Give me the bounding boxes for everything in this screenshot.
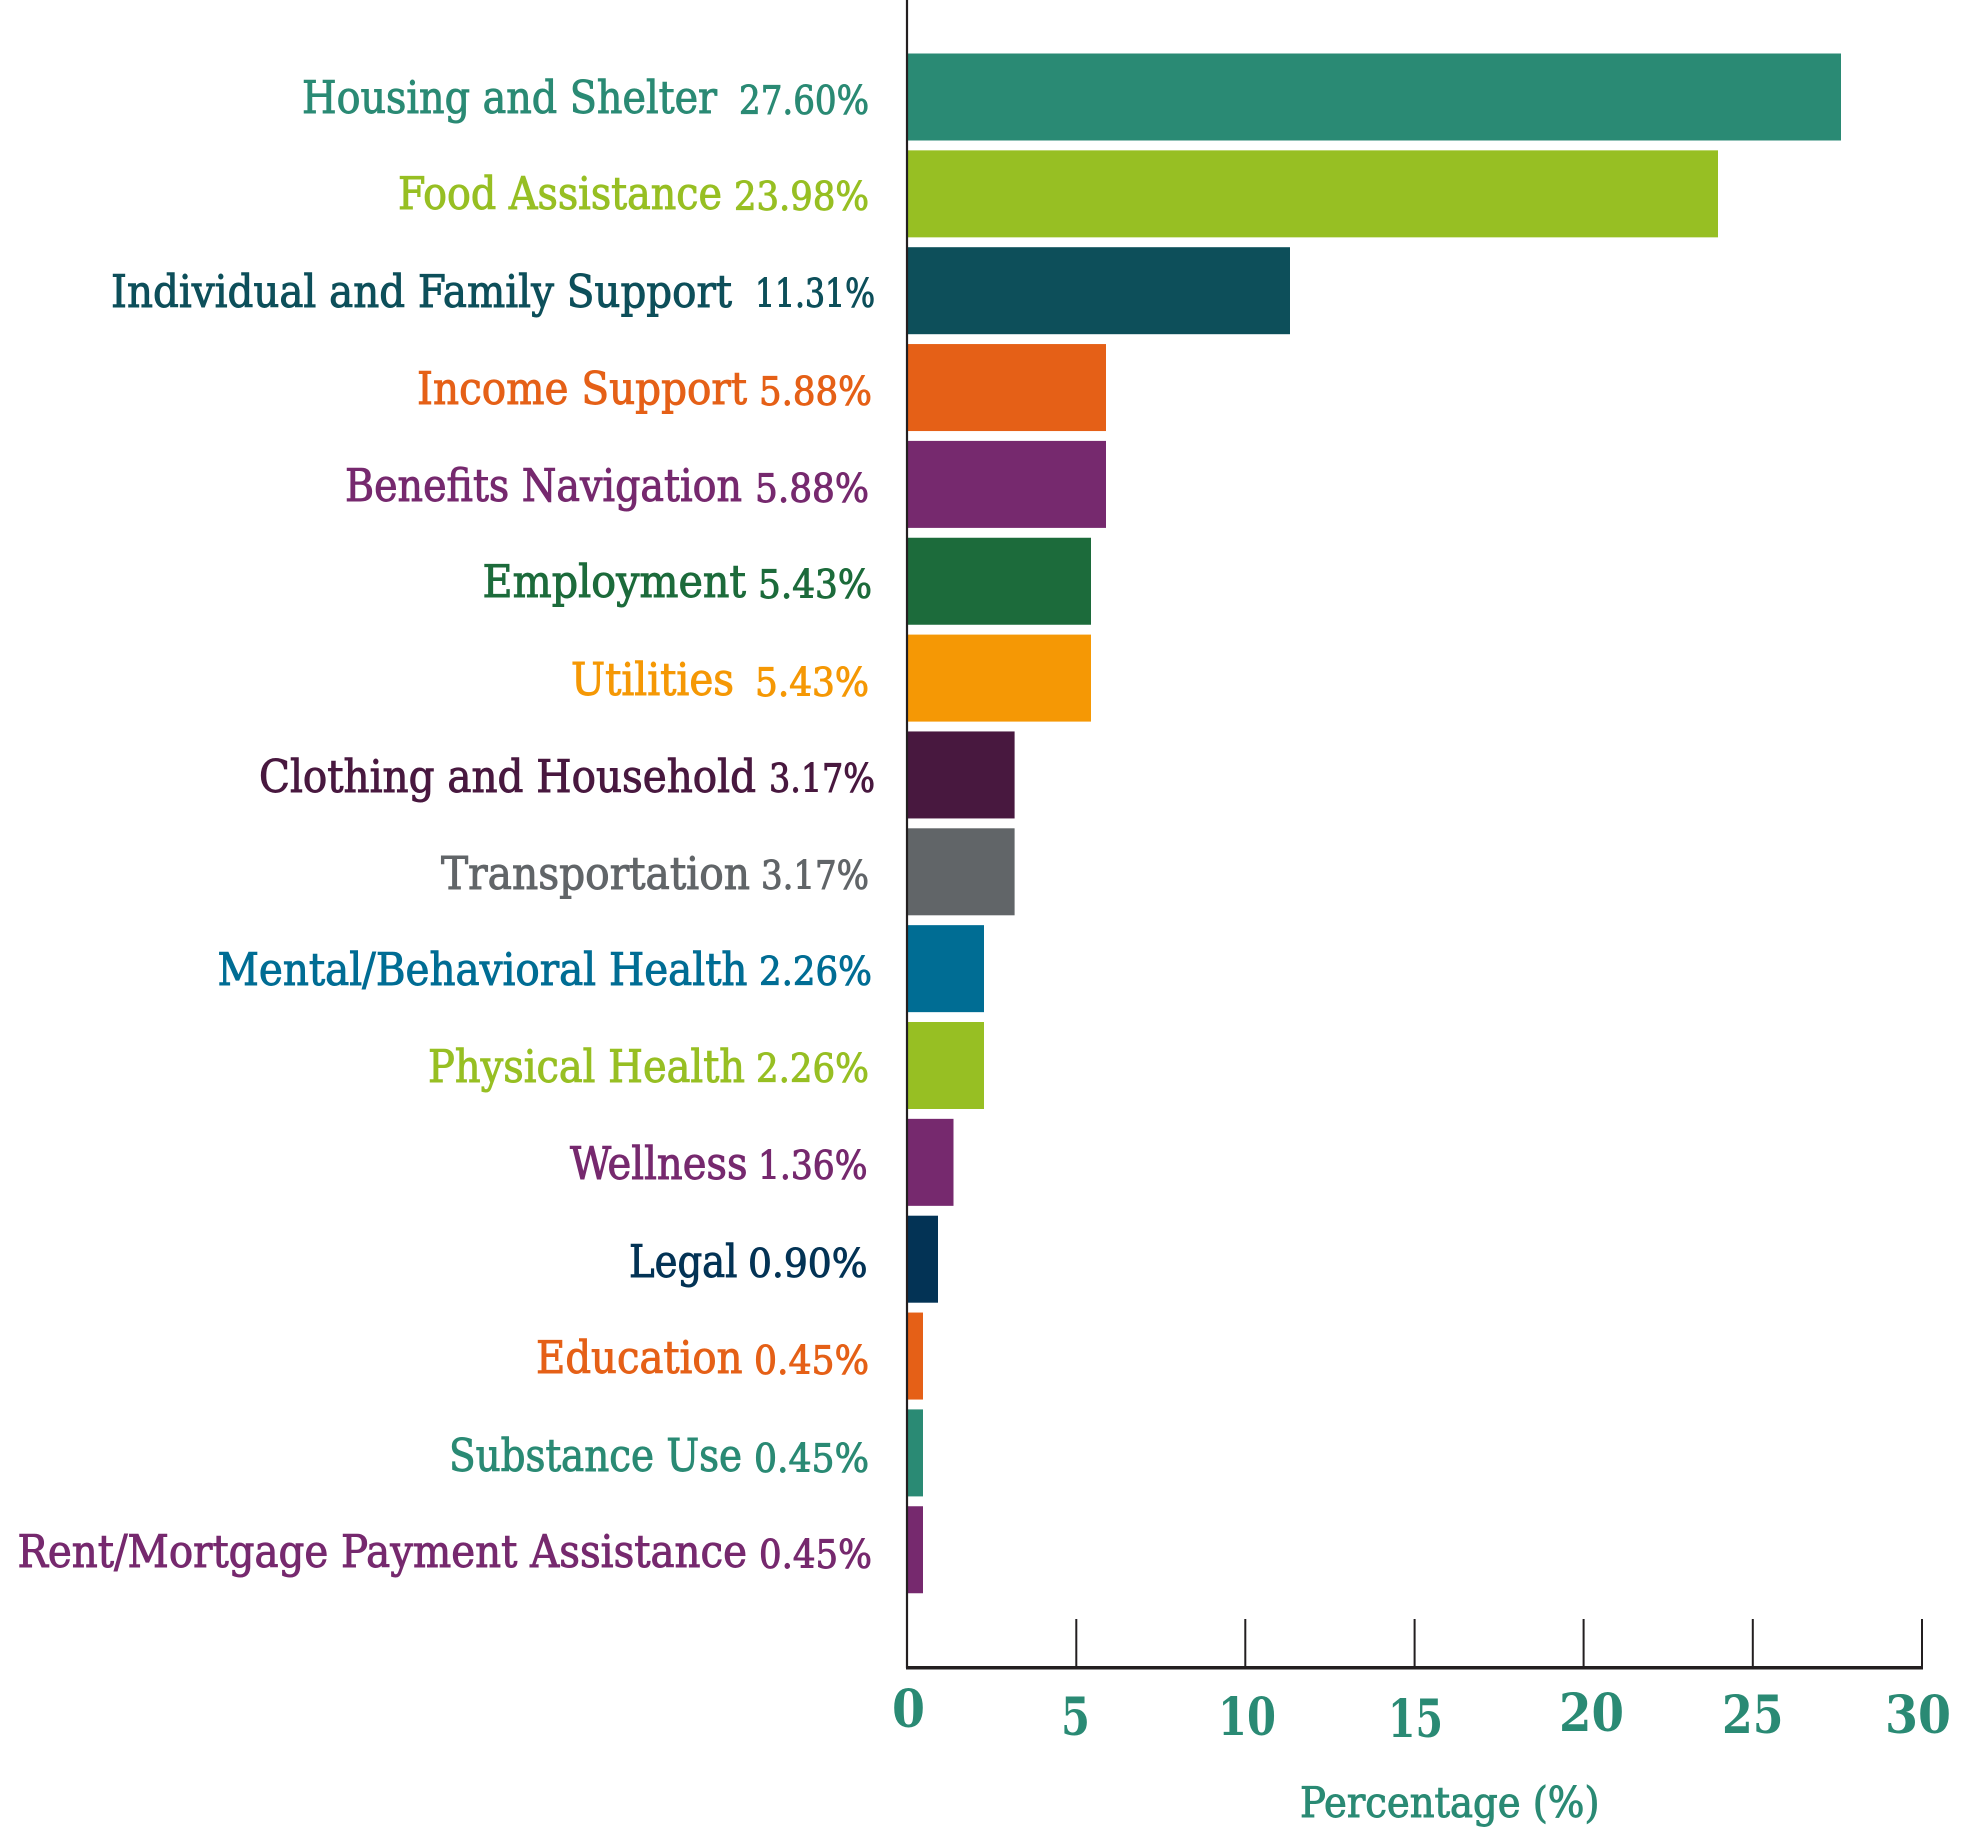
row: Utilities: 5.43% — [755, 661, 869, 706]
x axis tick labels: 25 — [1722, 1685, 1784, 1746]
row: Wellness: Wellness — [570, 1137, 748, 1190]
row: Individual and Family Support: Individual and Family Support — [111, 265, 732, 318]
x axis title: Percentage (%) — [1300, 1778, 1600, 1827]
x axis tick labels: 20 — [1559, 1683, 1624, 1744]
x axis tick labels: 30 — [1885, 1685, 1951, 1746]
row: Education: 0.45% — [754, 1339, 869, 1384]
row: Rent/Mortgage Payment Assistance — [18, 1506, 923, 1593]
x axis tick labels: 10 — [1218, 1687, 1276, 1748]
row: Individual and Family Support — [111, 247, 1290, 334]
row: Clothing and Household: Clothing and Household — [259, 750, 756, 803]
row: Employment — [482, 538, 1091, 625]
row: Wellness — [570, 1119, 954, 1206]
row: Benefits Navigation: Benefits Navigation — [345, 459, 742, 512]
row: Physical Health — [428, 1022, 984, 1109]
x axis tick labels: 15 — [1388, 1689, 1443, 1750]
row: Benefits Navigation — [345, 441, 1106, 528]
row: Housing and Shelter: Housing and Shelter — [302, 71, 718, 124]
row: Substance Use: Substance Use — [449, 1429, 742, 1482]
row: Legal: 0.90% — [748, 1242, 868, 1287]
x axis tick labels — [892, 1679, 1951, 1750]
row: Income Support — [417, 344, 1106, 431]
row: Legal — [629, 1216, 938, 1303]
row: Utilities: Utilities — [571, 653, 734, 706]
row: Transportation — [441, 828, 1015, 915]
row: Education — [536, 1313, 923, 1400]
axes and ticks — [906, 0, 1923, 1668]
row: Income Support: Income Support — [417, 362, 747, 415]
row: Mental/Behavioral Health — [218, 925, 984, 1012]
row: Individual and Family Support: 11.31% — [755, 272, 875, 317]
row: Clothing and Household: 3.17% — [769, 757, 875, 802]
row: Education: Education — [536, 1331, 742, 1384]
row: Transportation: Transportation — [441, 847, 750, 900]
row: Food Assistance: Food Assistance — [398, 167, 722, 220]
x axis tick labels: 5 — [1061, 1687, 1090, 1748]
row: Food Assistance: 23.98% — [734, 175, 869, 220]
row: Rent/Mortgage Payment Assistance: Rent/Mortgage Payment Assistance — [18, 1525, 747, 1578]
row: Legal: Legal — [629, 1235, 738, 1288]
row: Mental/Behavioral Health: Mental/Behavioral Health — [218, 943, 748, 996]
row: Physical Health: 2.26% — [756, 1047, 869, 1092]
row: Housing and Shelter: 27.60% — [739, 79, 869, 124]
row: Physical Health: Physical Health — [428, 1040, 745, 1093]
row: Mental/Behavioral Health: 2.26% — [759, 950, 872, 995]
row: Substance Use — [449, 1409, 923, 1496]
x axis tick labels: 0 — [892, 1679, 925, 1740]
row: Income Support: 5.88% — [759, 370, 872, 415]
row: Wellness: 1.36% — [758, 1144, 868, 1189]
row: Substance Use: 0.45% — [754, 1437, 869, 1482]
row: Transportation: 3.17% — [761, 854, 869, 899]
row: Food Assistance — [398, 150, 1718, 237]
row: Employment: 5.43% — [758, 563, 872, 608]
row: Rent/Mortgage Payment Assistance: 0.45% — [759, 1533, 872, 1578]
row: Clothing and Household — [259, 731, 1015, 818]
row: Housing and Shelter — [302, 54, 1841, 140]
row: Benefits Navigation: 5.88% — [755, 467, 869, 512]
row: Utilities — [571, 635, 1091, 722]
row: Employment: Employment — [482, 555, 746, 608]
